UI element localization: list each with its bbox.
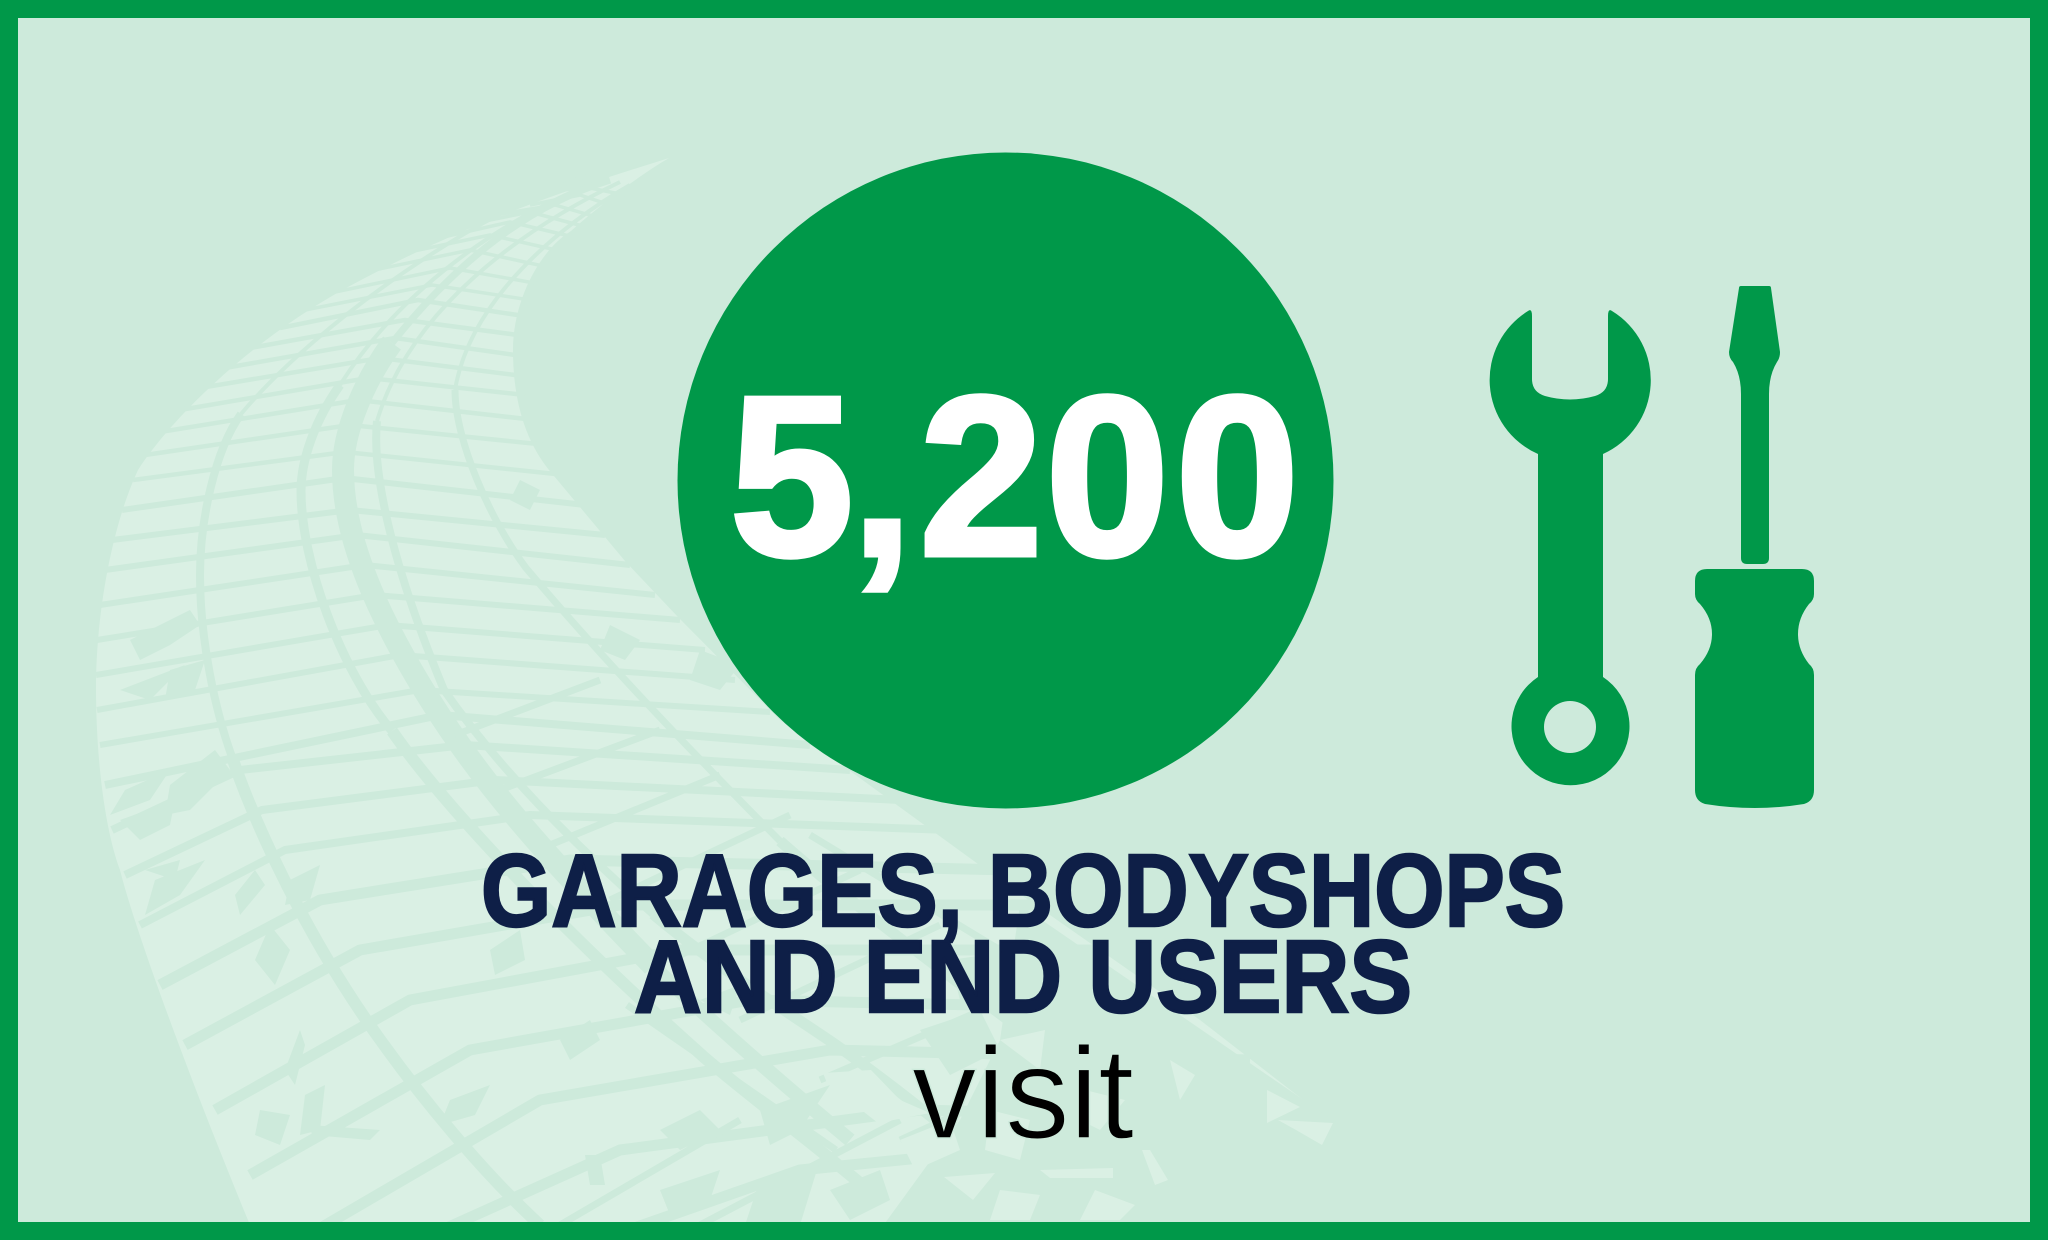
- statistic: 5,200: 5,200: [730, 348, 1299, 604]
- heading line 1: GARAGES, BODYSHOPS: [481, 833, 1565, 948]
- icon: screwdriver: [1695, 286, 1814, 808]
- heading: [481, 833, 1565, 1034]
- heading line 2: AND END USERS: [634, 919, 1412, 1034]
- icon: wrench: [1490, 310, 1651, 785]
- background tyre track: [96, 158, 1340, 1240]
- caption: visit: visit: [912, 1020, 1134, 1166]
- green circle with number: [678, 152, 1334, 808]
